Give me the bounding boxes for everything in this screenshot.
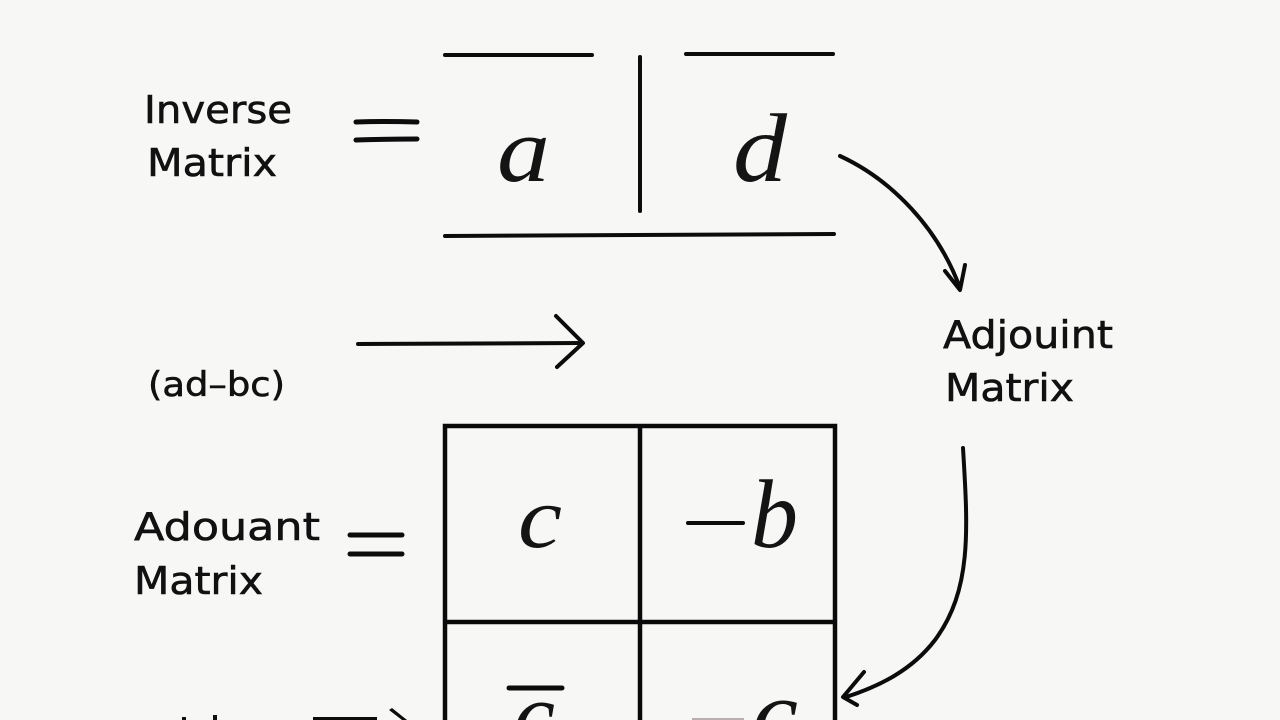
arrow: horizontal	[358, 316, 583, 367]
arrow: clipped bottom-left	[313, 708, 407, 720]
label: Inverse Matrix	[144, 88, 292, 185]
fraction: a and d: d	[733, 95, 788, 203]
clipped label at bottom edge	[182, 715, 217, 720]
label: Adjoint Matrix: Adjouint	[943, 313, 1113, 357]
label: Adouant Matrix: Adouant	[134, 505, 320, 549]
label: Inverse Matrix: Inverse	[144, 88, 292, 132]
matrix entry: clipped -c	[692, 662, 798, 720]
equals sign: adjugate matrix	[350, 535, 402, 554]
arrow: Adjoint Matrix to matrix	[843, 448, 966, 705]
label: Adjoint Matrix: Matrix	[945, 366, 1074, 410]
fraction: a and d	[445, 54, 834, 236]
arrow: d to Adjoint Matrix	[840, 156, 965, 290]
matrix entry: -b	[688, 461, 798, 569]
fraction: a and d: a	[497, 99, 550, 201]
matrix grid	[445, 426, 835, 720]
label: Inverse Matrix: Matrix	[147, 141, 277, 185]
label: Adouant Matrix: Matrix	[134, 559, 263, 603]
matrix entry: c: c	[518, 470, 562, 567]
matrix entry: -b: b	[751, 461, 798, 569]
equals sign: inverse matrix	[356, 122, 417, 140]
label: Adjoint Matrix	[943, 313, 1113, 410]
label: (ad-bc): (ad–bc)	[148, 365, 285, 405]
label: Adouant Matrix	[134, 505, 320, 603]
